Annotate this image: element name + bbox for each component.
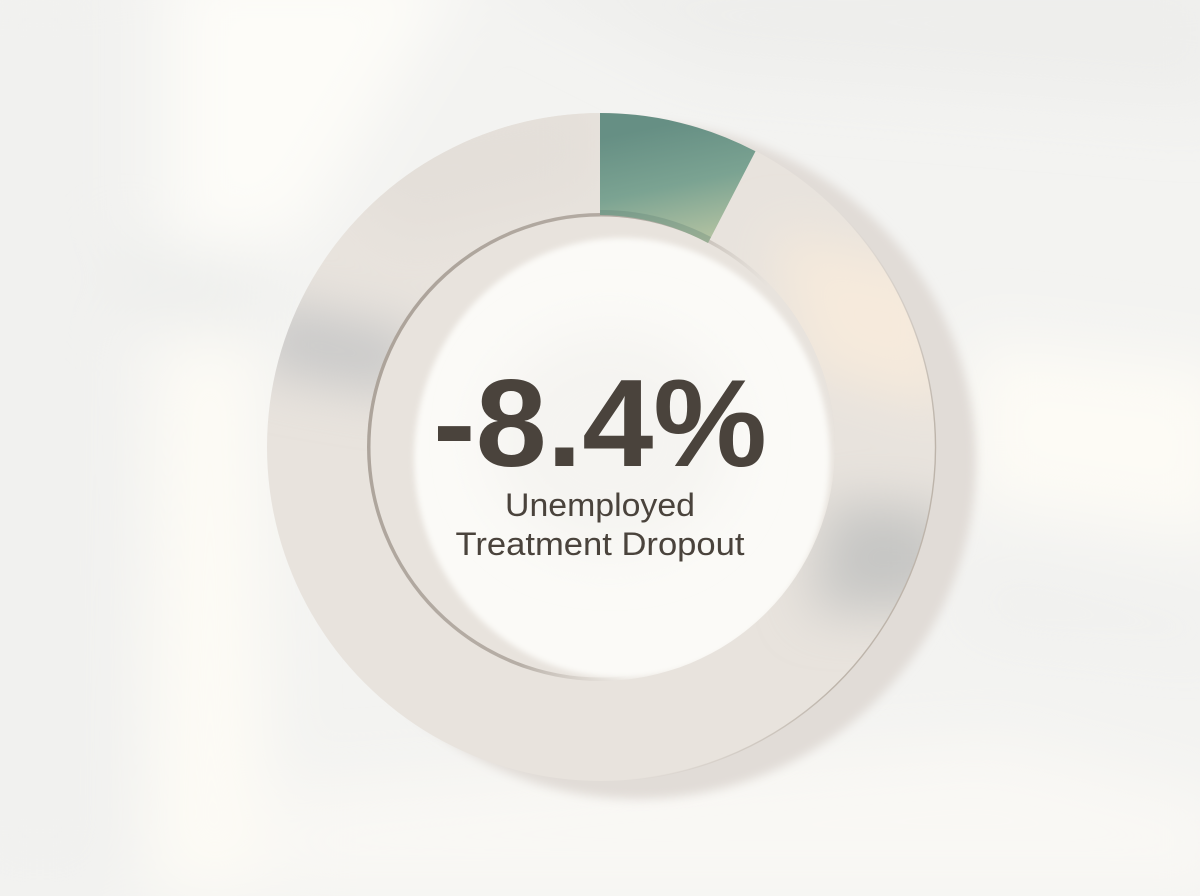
ring outer edge [600, 153, 936, 781]
label: Treatment Dropout [456, 526, 745, 562]
value: -8.4% [433, 355, 767, 493]
highlighted segment [600, 113, 756, 243]
label: Unemployed [505, 487, 695, 523]
ring cast shadow [300, 123, 976, 799]
label [456, 487, 745, 562]
hole with lit circle [360, 205, 840, 685]
donut ring [260, 90, 950, 790]
hole rim [367, 213, 748, 680]
ring track [267, 113, 934, 751]
